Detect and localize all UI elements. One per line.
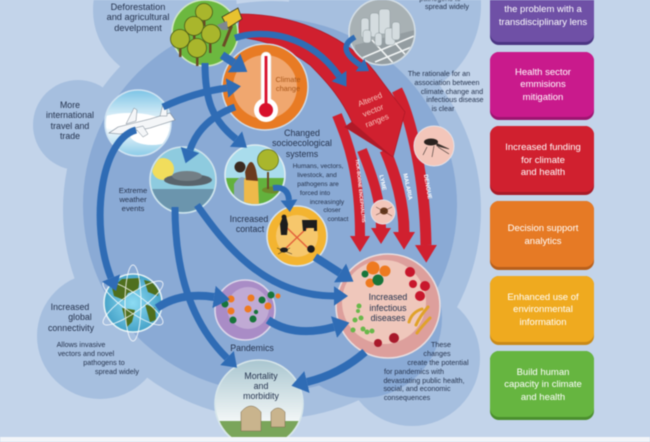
panel: increased funding: Increased funding (505, 142, 581, 153)
red arrow: tick-borne encephalitis: TICK-BORNE ENCEPHALITIS (355, 159, 366, 223)
panel: increased funding: and health (521, 167, 565, 178)
text: consequences: create the potential (407, 358, 469, 367)
text: increased contact: contact (236, 224, 265, 234)
text: increased contact (230, 214, 268, 234)
text: international travel: trade (60, 131, 80, 141)
text: forced contact note: closer (323, 207, 342, 214)
panel: environmental information: information (520, 317, 566, 328)
text: extreme weather: Extreme (119, 186, 147, 195)
text: connectivity note: spread widely (95, 367, 139, 376)
text: global connectivity: global (68, 312, 92, 322)
red arrow: altered vector ranges: Altered (357, 91, 384, 109)
circle: plane (98, 90, 175, 156)
climate label (275, 75, 301, 93)
text: deforestation: Deforestation (111, 2, 165, 12)
panel: decision support: analytics (525, 236, 562, 247)
panel: transdisciplinary lens (490, 0, 594, 45)
panel: increased funding: for climate (521, 155, 565, 166)
red arrow: malaria (385, 150, 413, 232)
red arrow: dengue: DENGUE (422, 174, 432, 200)
panel: transdisciplinary lens: the problem with a (504, 4, 583, 15)
circle: tick (371, 200, 395, 224)
infectious diseases label (369, 292, 407, 323)
text: forced contact note: livestock, and (297, 172, 337, 179)
text: global connectivity (48, 302, 95, 333)
text: consequences: consequences (384, 393, 431, 402)
panel: decision support (490, 201, 594, 270)
text: forced contact note (293, 163, 349, 223)
text: rationale: association between (414, 78, 480, 87)
circle: infectious diseases (336, 254, 440, 358)
text: consequences: for pandemics with (384, 367, 444, 376)
arrow: pandemics to infectious diseases (268, 320, 334, 331)
pandemics label: Pandemics (230, 343, 274, 353)
arrow: people to contact (273, 188, 289, 200)
text: connectivity note: pathogens to (83, 358, 125, 367)
panel: human capacity: and health (521, 392, 565, 403)
text: international travel: international (46, 110, 94, 120)
panel: human capacity (490, 351, 594, 420)
arrow: deforestation to socioecological systems (205, 63, 236, 139)
climate label: change (276, 84, 300, 93)
text: increased contact: Increased (230, 214, 268, 224)
circle: globe (98, 265, 168, 341)
mortality label: and (254, 381, 268, 391)
red arrow: Lyme: LYME (377, 175, 387, 191)
icon: thermometer (254, 52, 278, 122)
text: international travel (46, 100, 94, 141)
text: connectivity note: vectors and novel (58, 349, 115, 358)
panel: increased funding (490, 126, 594, 195)
circle: pandemics (215, 280, 280, 353)
circle: mosquito (414, 126, 454, 166)
panel: emissions mitigation: Health sector (515, 67, 571, 78)
infectious diseases label: Increased (369, 292, 407, 302)
panel: transdisciplinary lens: transdisciplinary lens (499, 17, 587, 28)
arrow: globe to pandemics (157, 296, 214, 308)
arrow: travel to global connectivity (100, 130, 136, 278)
panel: decision support: Decision support (508, 223, 579, 234)
panel: emissions mitigation (490, 52, 594, 120)
text: forced contact note: pathogens are (297, 181, 339, 188)
text: deforestation (107, 2, 169, 33)
red arrow: Lyme (362, 150, 387, 228)
red arrow: dengue (397, 90, 432, 245)
text: consequences (383, 340, 469, 402)
background blobs (33, 0, 481, 426)
arrow: infectious diseases to mortality (307, 352, 365, 382)
arrow: climate change to extreme weather (190, 107, 235, 150)
red arrow: malaria: MALARIA (401, 173, 413, 201)
arrow: urbanisation to altered vector ranges (346, 37, 360, 65)
text: global connectivity: connectivity (48, 323, 95, 333)
red arrow: tick-borne encephalitis (337, 115, 366, 236)
text: deforestation: and agricultural (107, 12, 169, 22)
text: changed socioecological systems: Changed (284, 128, 320, 138)
text: rationale: The rationale for an (408, 69, 470, 78)
text: forced contact note: forced into (300, 190, 331, 197)
arrow: travel to climate change (163, 88, 227, 107)
red arrow: altered vector ranges: vector (361, 102, 385, 119)
circle: extreme weather (150, 147, 216, 215)
text: urbanisation note: spread widely (425, 2, 469, 11)
text: rationale: infectious disease (426, 95, 484, 104)
arrow: deforestation to climate change (222, 55, 234, 63)
red arrow: altered vector ranges: ranges (364, 112, 390, 129)
text: deforestation: develpment (114, 23, 162, 33)
text: changed socioecological systems (272, 128, 332, 159)
panel: environmental information: environmental (513, 304, 573, 315)
arrow: deforestation to altered vector ranges (235, 34, 339, 76)
circle: people (225, 145, 285, 208)
text: international travel: More (60, 100, 80, 110)
arrow: weather to infectious diseases (197, 205, 334, 296)
text: connectivity note: Allows invasive (57, 340, 105, 349)
infectious diseases label: infectious (369, 303, 407, 313)
arrow: contact to infectious diseases (315, 257, 340, 273)
circle: deforestation (170, 0, 242, 66)
panel: environmental information: Enhanced use of (507, 292, 579, 303)
red arrow: altered vector ranges (238, 14, 405, 157)
text: connectivity note (57, 340, 139, 376)
text: consequences: These (431, 340, 451, 349)
text: consequences: changes (423, 349, 451, 358)
text: extreme weather: weather (118, 195, 147, 204)
mortality label: morbidity (243, 391, 279, 401)
text: forced contact note: contact (328, 216, 349, 223)
circle: increased contact (267, 206, 327, 266)
panel: emissions mitigation: emmisions (520, 79, 566, 90)
circle: mortality and morbidity (215, 360, 305, 442)
panel: emissions mitigation: mitigation (523, 92, 563, 103)
text: rationale: climate change and (421, 87, 483, 96)
mortality label: Mortality (244, 371, 278, 381)
climate label: Climate (275, 75, 301, 84)
panel: human capacity: capacity in climate (504, 379, 582, 390)
text: forced contact note: Humans, vectors, (293, 163, 343, 170)
panel: environmental information (490, 276, 594, 345)
text: forced contact note: increasingly (310, 199, 345, 206)
circle: climate change (222, 44, 308, 130)
mortality label (243, 371, 279, 401)
text: changed socioecological systems: systems (286, 149, 319, 159)
text: international travel: travel and (51, 121, 89, 131)
text: consequences: social, and economic (383, 384, 451, 393)
text: rationale (408, 69, 484, 113)
circle: city (349, 0, 415, 70)
arrow: weather to mortality (175, 207, 227, 358)
text: changed socioecological systems: socioecological (272, 138, 332, 148)
text: consequences: devastating public health, (383, 376, 465, 385)
text: extreme weather: events (122, 204, 144, 213)
text: rationale: is clear (432, 104, 455, 113)
infectious diseases label: diseases (371, 313, 406, 323)
panel: human capacity: Build human (517, 367, 569, 378)
text: global connectivity: Increased (51, 302, 89, 312)
text: extreme weather (118, 186, 147, 213)
